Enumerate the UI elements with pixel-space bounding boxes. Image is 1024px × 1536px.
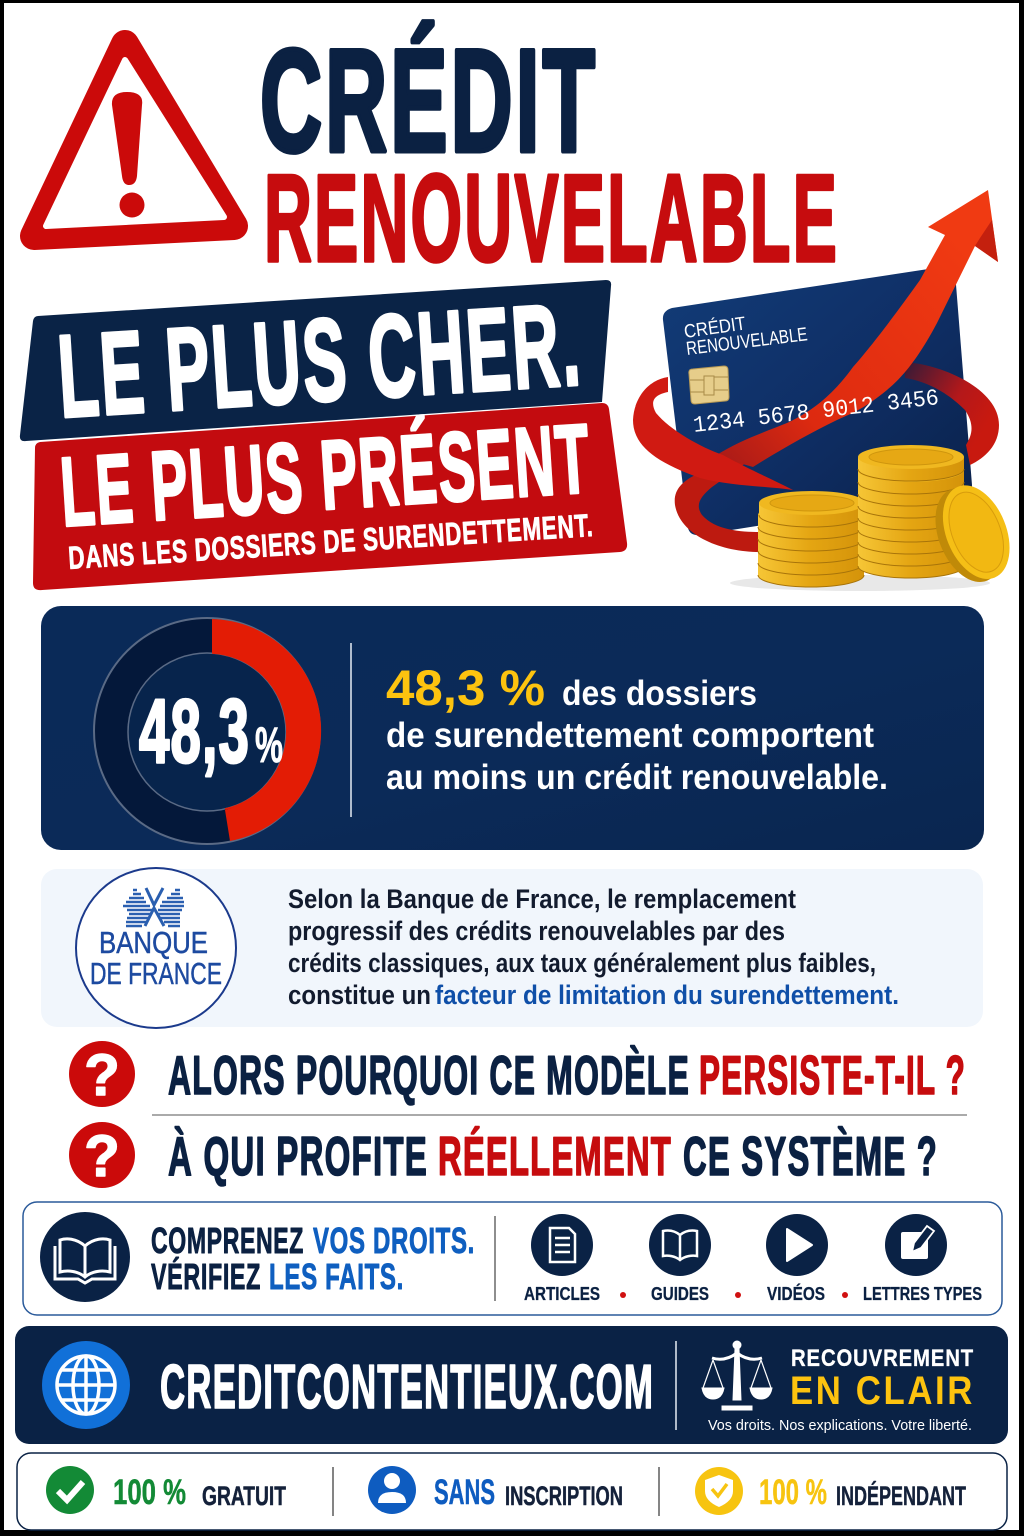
badge: 100 % gratuit: 100 % (113, 1473, 186, 1512)
donut chart (94, 618, 321, 844)
donut chart: % (255, 717, 283, 773)
separator dots (620, 1292, 848, 1298)
brand: recouvrement en clair (708, 1345, 975, 1434)
panel: guarantees (17, 1453, 1007, 1530)
resource: lettres types (863, 1214, 982, 1304)
ribbon back (905, 362, 999, 465)
question 2: ? (84, 1124, 120, 1189)
questions (69, 1041, 967, 1189)
badge: sans inscription: SANS (434, 1473, 495, 1512)
panel: website bar (15, 1326, 1008, 1444)
paragraph (288, 884, 899, 1010)
ribbon lower loop (675, 450, 760, 552)
headline banners (20, 278, 627, 590)
paragraph: facteur de limitation du surendettement. (435, 980, 899, 1010)
icon: open book (40, 1212, 130, 1302)
icon: warning triangle (34, 44, 234, 236)
panel: 48,3 % statistic (41, 606, 984, 850)
statistic text: 48,3 % (386, 660, 545, 716)
question 2: À QUI PROFITE (168, 1125, 428, 1187)
brand: recouvrement en clair: Vos droits. Nos explications. Votre liberté. (708, 1417, 972, 1434)
icon: scales of justice (702, 1341, 772, 1410)
resource: guides: GUIDES (651, 1284, 709, 1304)
donut chart: 48,3 (139, 682, 250, 782)
icon: globe (42, 1341, 130, 1429)
rising arrow (715, 190, 998, 467)
resource: videos: VIDÉOS (767, 1283, 825, 1304)
logo: Banque de France: BANQUE (99, 925, 208, 960)
paragraph: progressif des crédits renouvelables par des (288, 916, 785, 946)
credit card: RENOUVELABLE (685, 324, 809, 360)
logo: Banque de France: DE FRANCE (90, 956, 222, 991)
resource: articles: ARTICLES (524, 1284, 600, 1304)
title: CRÉDIT (260, 19, 598, 182)
statistic text: des dossiers (562, 674, 757, 713)
call to action: VÉRIFIEZ (151, 1256, 261, 1297)
paragraph: Selon la Banque de France, le remplacement (288, 884, 796, 914)
illustration: credit card, arrow and coins (633, 190, 1022, 592)
call to action: LES FAITS. (269, 1256, 404, 1297)
question 2: RÉELLEMENT (438, 1125, 672, 1187)
brand: recouvrement en clair: EN CLAIR (790, 1369, 975, 1413)
question 1: ? (84, 1043, 120, 1108)
banner: le plus cher (20, 278, 611, 442)
banner: le plus present (33, 403, 627, 590)
call to action: VOS DROITS. (313, 1220, 475, 1261)
credit card: CRÉDIT (683, 313, 747, 343)
badge: sans inscription (368, 1466, 623, 1514)
badge: 100 % independant: 100 % (759, 1473, 827, 1512)
card number: 1234 5678 9012 3456 (692, 385, 940, 439)
banner: le plus present: LE PLUS PRÉSENT (57, 403, 594, 547)
resource: guides (649, 1214, 711, 1304)
call to action: COMPRENEZ (151, 1220, 304, 1261)
coin shadow (730, 575, 990, 591)
paragraph: crédits classiques, aux taux généralement plus faibles, (288, 948, 876, 978)
standing coin (923, 476, 1022, 592)
resource: lettres types: LETTRES TYPES (863, 1284, 982, 1304)
credit card (663, 266, 972, 535)
statistic text: au moins un crédit renouvelable. (386, 758, 888, 797)
website name: CREDITCONTENTIEUX.COM (160, 1353, 654, 1422)
banner: le plus cher: LE PLUS CHER. (54, 278, 586, 442)
panel: comprenez vos droits (23, 1202, 1002, 1315)
resource: articles (524, 1214, 600, 1304)
logo: Banque de France (76, 868, 236, 1028)
badge: 100 % gratuit: GRATUIT (202, 1481, 286, 1511)
call to action (151, 1220, 475, 1297)
resource: videos (766, 1214, 828, 1304)
panel: Banque de France (41, 868, 983, 1028)
badge: 100 % independant (695, 1467, 966, 1515)
statistic text (386, 660, 888, 797)
coin stacks (758, 445, 964, 587)
badge: sans inscription: INSCRIPTION (505, 1481, 623, 1511)
question 2 (69, 1122, 938, 1189)
paragraph: constitue un (288, 980, 431, 1010)
banner: le plus present: DANS LES DOSSIERS DE SURENDETTEMENT. (67, 507, 594, 576)
ribbon left band (633, 377, 793, 490)
brand: recouvrement en clair: RECOUVREMENT (791, 1345, 974, 1372)
statistic text: de surendettement comportent (386, 716, 874, 755)
badge: 100 % gratuit (46, 1466, 286, 1514)
title (260, 19, 839, 288)
